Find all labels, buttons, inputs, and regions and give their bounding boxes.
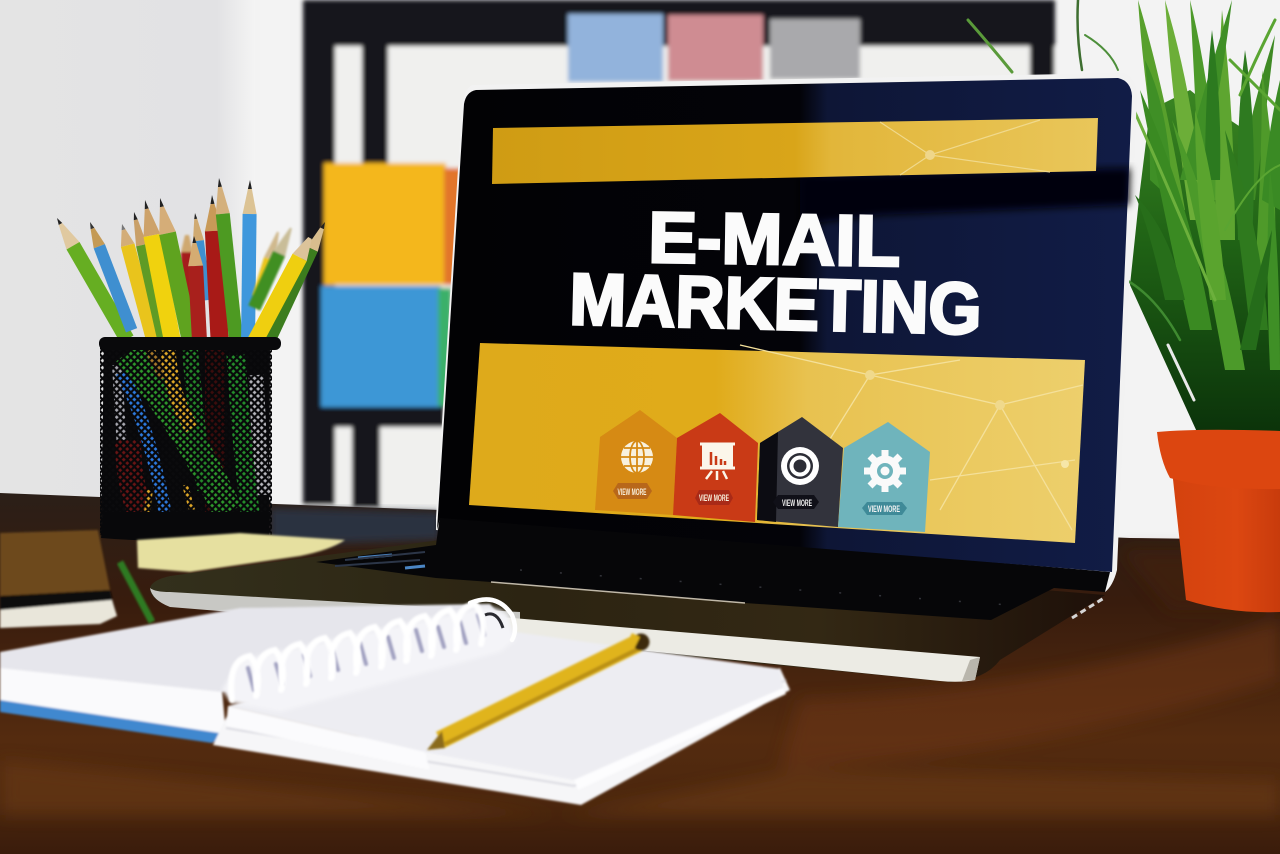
blurred bookshelf with coloured boxes: [303, 0, 1055, 515]
upper light blades: [1138, 0, 1280, 270]
blurred dark area behind laptop: [270, 508, 440, 545]
card: presentation board: [673, 413, 758, 522]
left page top: [0, 604, 520, 692]
right book stack: [213, 668, 790, 805]
right page surface: [228, 632, 783, 780]
headline: MARKETING: [569, 259, 983, 350]
black strip reflection: [800, 168, 1130, 225]
card: gear: [838, 422, 930, 532]
mid blades: [1135, 90, 1280, 370]
desk reflection streaks: [0, 550, 1280, 815]
top yellow band: [492, 118, 1098, 184]
spiral binding: [222, 599, 515, 712]
blue back cover: [0, 698, 236, 743]
pencil cup: [51, 177, 330, 541]
ports: [1072, 598, 1104, 618]
card: presentation board: VIEW MORE: [699, 493, 729, 503]
left silver edge: [150, 588, 520, 628]
front silver edge: [500, 617, 980, 682]
yellow pencil: [427, 634, 650, 750]
small pencil on desk: [120, 562, 152, 622]
mesh cup: [101, 345, 270, 535]
headline: E-MAIL: [648, 198, 901, 282]
flower pot: [1172, 470, 1280, 612]
thin highlight blades: [968, 0, 1280, 400]
screen lid edge: [436, 73, 1137, 592]
desk surface: [0, 493, 1280, 854]
lower yellow band: [469, 343, 1085, 543]
plant and pot: [968, 0, 1280, 612]
screen: [437, 78, 1132, 572]
pencils: [51, 177, 330, 345]
headline: [569, 198, 983, 350]
sticky notes: [137, 533, 345, 572]
card: target: [757, 417, 843, 527]
closed brown notebook: [0, 530, 117, 628]
card: gear: VIEW MORE: [868, 504, 900, 514]
open spiral notebook: [0, 604, 790, 805]
card: target: VIEW MORE: [782, 498, 812, 508]
laptop base: [150, 540, 1105, 682]
keyboard: [316, 515, 1110, 620]
laptop: [150, 73, 1137, 682]
grass mass: [1130, 90, 1280, 432]
card: globe: VIEW MORE: [618, 487, 646, 497]
left page front: [0, 666, 226, 734]
keyboard highlights: [335, 552, 1010, 605]
card: globe: [595, 410, 677, 515]
